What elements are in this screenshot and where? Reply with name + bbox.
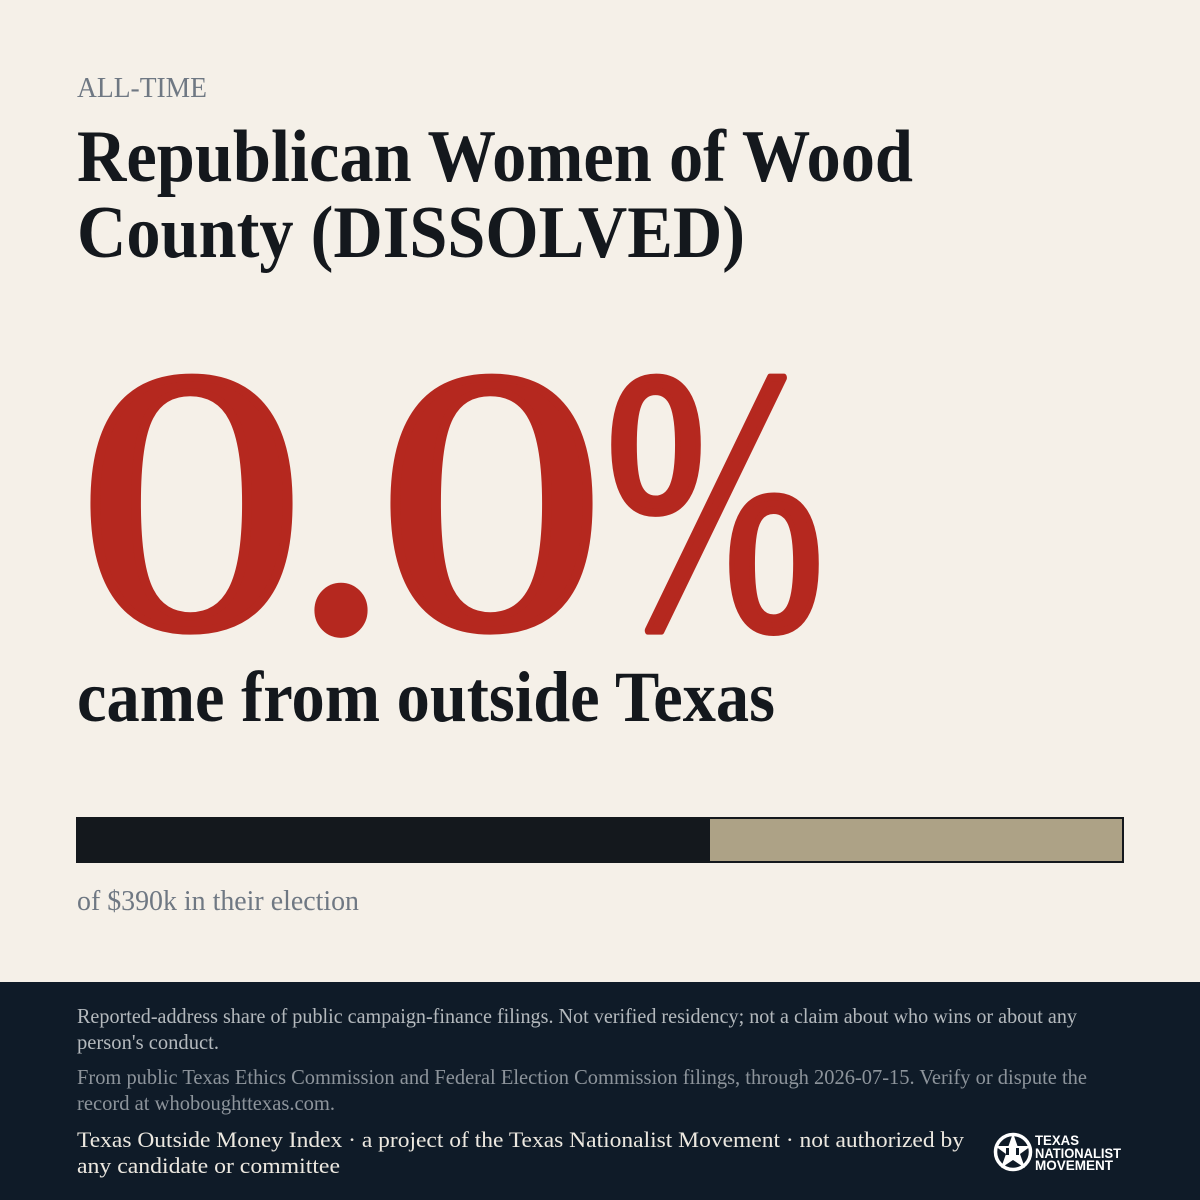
title — [77, 116, 913, 274]
big percentage: 0 — [378, 294, 605, 709]
big percentage: % — [605, 294, 825, 709]
logo wordmark: MOVEMENT — [1035, 1158, 1114, 1173]
attribution: any candidate or committee — [77, 1153, 340, 1178]
icon: star in ring — [995, 1133, 1031, 1170]
footer panel — [0, 982, 1200, 1200]
logo: Texas Nationalist Movement — [995, 1133, 1122, 1173]
big percentage: . — [300, 330, 382, 707]
subheading: came from outside Texas — [77, 657, 775, 737]
bar caption: of $390k in their election — [77, 885, 359, 917]
title: County (DISSOLVED) — [77, 192, 745, 274]
logo wordmark: TEXAS — [1035, 1133, 1079, 1148]
attribution — [77, 1127, 964, 1178]
big percentage: 0 — [78, 294, 305, 709]
big percentage — [78, 294, 825, 709]
logo wordmark — [1035, 1133, 1122, 1173]
logo wordmark: NATIONALIST — [1035, 1146, 1122, 1161]
disclaimer: person's conduct. — [77, 1030, 219, 1054]
disclaimer: Reported-address share of public campaign-finance filings. Not verified residency; not a claim about who wins or about any — [77, 1004, 1077, 1028]
source note: record at whoboughttexas.com. — [77, 1091, 335, 1115]
source note — [77, 1065, 1087, 1115]
source note: From public Texas Ethics Commission and Federal Election Commission filings, through 2026-07-15. Verify or dispute the — [77, 1065, 1087, 1089]
attribution: Texas Outside Money Index · a project of the Texas Nationalist Movement · not authorized by — [77, 1127, 964, 1152]
title: Republican Women of Wood — [77, 116, 913, 198]
eyebrow label: ALL-TIME — [77, 73, 207, 104]
bar chart — [76, 817, 1123, 863]
disclaimer — [77, 1004, 1077, 1054]
